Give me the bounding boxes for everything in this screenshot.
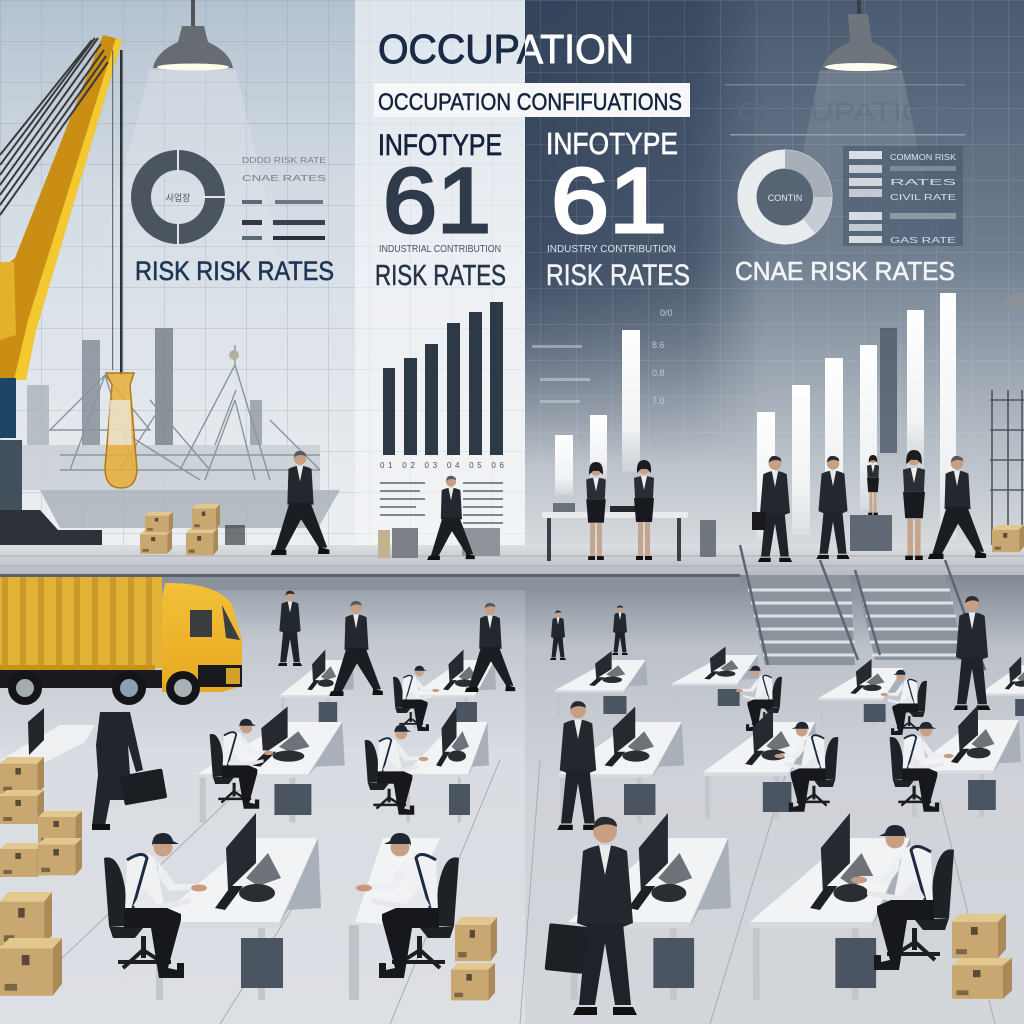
- background wall: dark right panel: [0, 0, 1024, 545]
- bar chart mid white: 0/0: [660, 308, 673, 318]
- workers on platform: [271, 450, 986, 562]
- background wall: left panel: [0, 0, 355, 545]
- background wall: middle light panel: [355, 0, 525, 545]
- legend rows right: COMMON RISK: [890, 153, 957, 162]
- bar chart mid white: 7.0: [652, 396, 665, 406]
- top row seated workers: [393, 666, 927, 735]
- risk rates left: RISK RATES: [375, 260, 506, 292]
- cargo boxes on platform: [140, 504, 1024, 555]
- bar chart labels and notes: 01 02 03 04 05 06: [380, 461, 505, 470]
- upper platform: [0, 545, 1024, 590]
- banner: occupation configurations: OCCUPATION CONFIFUATIONS: [378, 89, 682, 116]
- legend rows left: DDDD RISK RATE: [242, 156, 326, 165]
- donut chart right: CONTIN: [768, 193, 802, 203]
- scaffold: [990, 390, 1024, 550]
- stairs: [740, 545, 985, 670]
- industrial ship backdrop: [20, 328, 340, 528]
- bar chart mid white: 8.6: [652, 340, 665, 350]
- small caption left: INDUSTRIAL CONTRIBUTION: [379, 244, 501, 255]
- big desk left with worker: [104, 813, 321, 1000]
- equipment on platform: [378, 515, 892, 558]
- middle row seated workers: [210, 719, 953, 815]
- heading: cnae risk rates: CNAE RISK RATES: [735, 256, 955, 286]
- ceiling lamp right: [780, 0, 940, 260]
- walking staff on lower floor: [278, 591, 990, 710]
- lower floor left: [0, 575, 525, 1024]
- middle row desks: [0, 705, 1021, 822]
- legend rows left: [242, 156, 326, 240]
- faded occupation heading: OCCUPATION: [737, 97, 951, 127]
- bar chart mid white: 0.8: [652, 368, 665, 378]
- yellow crane: [0, 35, 137, 553]
- risk rates right: RISK RATES: [546, 259, 690, 292]
- bar chart right white: [757, 293, 956, 540]
- legend rows right: RATES: [890, 178, 956, 187]
- number 61 right: 61: [551, 150, 667, 252]
- top row desks: [280, 646, 1024, 728]
- ceiling lamp left: [90, 0, 290, 300]
- big desk right with seated woman: [750, 813, 1012, 1000]
- infotype right: INFOTYPE: [546, 126, 678, 161]
- heading: risk risk rates: RISK RISK RATES: [135, 256, 334, 286]
- small caption right: INDUSTRY CONTRIBUTION: [547, 244, 676, 255]
- legend rows right: CIVIL RATE: [890, 193, 956, 202]
- bar chart labels and notes: [380, 461, 505, 524]
- big desk centre-left with worker: [349, 833, 497, 1000]
- donut chart right: [747, 150, 832, 235]
- bar chart dark: [383, 302, 503, 455]
- legend rows left: CNAE RATES: [242, 174, 326, 183]
- reception table: [542, 503, 688, 561]
- stacked boxes left: [0, 757, 82, 996]
- lower floor right: [60, 575, 1024, 1024]
- infotype left: INFOTYPE: [378, 129, 502, 162]
- number 61 left: 61: [383, 150, 491, 252]
- title: OCCUPATION: [378, 26, 634, 72]
- big desk centre with suited man: [545, 813, 731, 1015]
- donut chart left: 사업장: [166, 193, 190, 203]
- legend rows right: GAS RATE: [890, 236, 956, 245]
- donut chart left: [141, 150, 225, 244]
- legend rows right: [843, 146, 963, 246]
- yellow truck: [0, 577, 242, 705]
- staff walking centre: [557, 701, 599, 830]
- small wall lamp at right edge: [1000, 292, 1024, 308]
- staff with briefcase left: [92, 712, 167, 830]
- bar chart mid white: [532, 308, 673, 495]
